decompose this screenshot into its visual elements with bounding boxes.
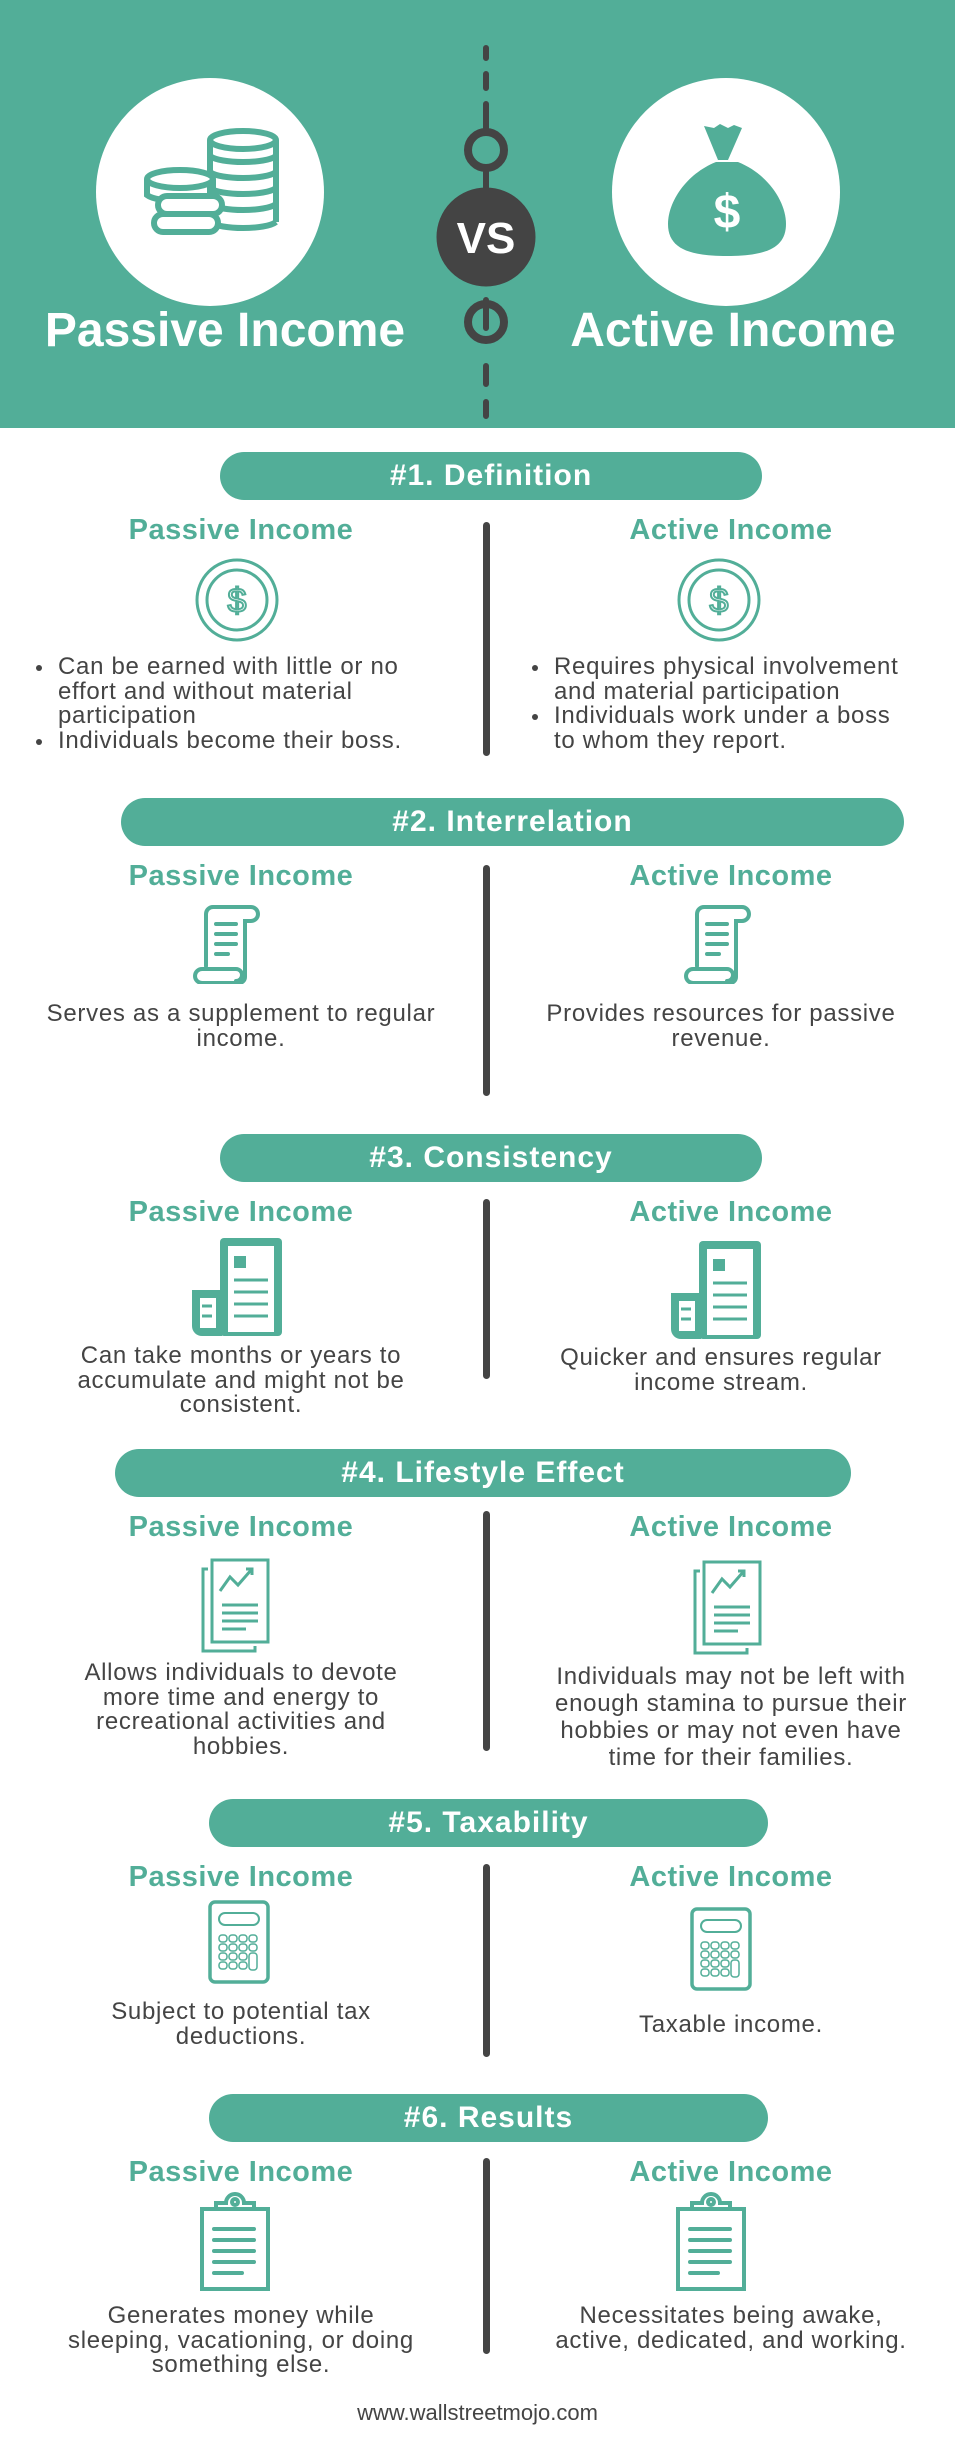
icon: calculator passive <box>208 1900 270 1984</box>
text active: Quicker and ensures regular <box>560 1344 882 1371</box>
pill heading: #1. Definition <box>390 459 592 492</box>
text passive: Subject to potential tax <box>111 1998 371 2025</box>
pill heading: #6. Results <box>404 2101 573 2134</box>
title: Active Income: Active Income <box>570 304 896 357</box>
text active: Necessitates being awake, <box>580 2302 882 2329</box>
subheading active: Active Income <box>629 2156 833 2188</box>
text active: enough stamina to pursue their <box>555 1690 907 1717</box>
subheading passive: Passive Income <box>129 514 353 546</box>
pill heading <box>209 1799 768 1847</box>
vs connector <box>436 45 536 419</box>
bullets passive: participation <box>58 702 197 729</box>
vs connector: VS <box>457 214 515 263</box>
text passive: Allows individuals to devote <box>84 1659 398 1686</box>
subheading passive: Passive Income <box>129 1196 353 1228</box>
icon: chart document passive <box>202 1558 270 1652</box>
text active: active, dedicated, and working. <box>555 2326 907 2354</box>
subheading active: Active Income <box>629 1196 833 1228</box>
divider <box>483 865 490 1096</box>
section 5: Taxability <box>111 1799 833 2057</box>
text passive: sleeping, vacationing, or doing <box>68 2326 414 2354</box>
icon: newspaper passive <box>192 1238 282 1336</box>
text active: Provides resources for passive <box>546 1000 896 1027</box>
text active: hobbies or may not even have <box>560 1717 902 1744</box>
icon: dollar coin active <box>678 558 760 642</box>
pill heading: #3. Consistency <box>369 1141 613 1174</box>
icon: dollar coin passive <box>196 558 278 642</box>
text passive: income. <box>197 1024 285 1052</box>
text active: income stream. <box>634 1368 808 1396</box>
text active: Taxable income. <box>639 2011 823 2038</box>
subheading passive: Passive Income <box>129 1511 353 1543</box>
pill heading <box>220 452 762 500</box>
footer url: www.wallstreetmojo.com <box>357 2400 598 2425</box>
pill heading <box>220 1134 762 1182</box>
text active <box>546 1000 896 1052</box>
bullets passive: Can be earned with little or no <box>58 653 399 680</box>
text passive: Generates money while <box>108 2302 374 2329</box>
pill heading: #5. Taxability <box>388 1806 589 1839</box>
icon: scroll active <box>684 905 751 984</box>
subheading passive: Passive Income <box>129 860 353 892</box>
title: Passive Income: Passive Income <box>45 304 405 357</box>
subheading active: Active Income <box>629 860 833 892</box>
subheading passive: Passive Income <box>129 1861 353 1893</box>
text passive: consistent. <box>180 1391 302 1418</box>
icon: dollar coin passive: $ <box>228 582 247 620</box>
bullets passive: Individuals become their boss. <box>58 726 402 754</box>
subheading active: Active Income <box>629 1511 833 1543</box>
text passive: deductions. <box>176 2022 306 2050</box>
bullets passive: effort and without material <box>58 678 353 704</box>
icon: clipboard passive <box>200 2192 270 2291</box>
divider <box>483 1511 490 1751</box>
text active <box>555 1663 907 1771</box>
section 4: Lifestyle Effect <box>84 1449 907 1771</box>
icon: clipboard active <box>676 2192 746 2291</box>
section 6: Results <box>68 2094 907 2378</box>
text passive: something else. <box>152 2351 330 2378</box>
bullets active: Requires physical involvement <box>554 653 898 680</box>
divider <box>483 2158 490 2354</box>
text passive: hobbies. <box>193 1732 289 1760</box>
icon: dollar coin active: $ <box>710 582 729 620</box>
icon: chart document active <box>694 1560 762 1654</box>
text active <box>555 2302 907 2354</box>
text passive <box>77 1342 405 1418</box>
bullets active: and material participation <box>554 678 840 704</box>
bullets active: to whom they report. <box>554 726 787 754</box>
text passive <box>68 2302 414 2378</box>
icon: scroll passive <box>193 905 260 984</box>
pill heading: #4. Lifestyle Effect <box>341 1456 625 1489</box>
bullets active <box>532 653 898 754</box>
divider <box>483 1864 490 2057</box>
pill heading: #2. Interrelation <box>392 805 633 838</box>
text passive: Serves as a supplement to regular <box>47 1000 435 1027</box>
section 2: Interrelation <box>47 798 904 1096</box>
text passive <box>84 1659 398 1760</box>
bullets passive <box>36 653 402 754</box>
icon: money bag circle <box>612 78 840 306</box>
pill heading <box>115 1449 851 1497</box>
subheading active: Active Income <box>629 1861 833 1893</box>
text active: revenue. <box>672 1024 770 1052</box>
text passive: Can take months or years to <box>81 1342 401 1369</box>
icon: newspaper active <box>671 1241 761 1339</box>
subheading passive: Passive Income <box>129 2156 353 2188</box>
section 1: Definition <box>36 452 898 756</box>
text passive <box>111 1998 371 2050</box>
pill heading <box>121 798 904 846</box>
icon: coin stacks circle <box>96 78 324 306</box>
bullets active: Individuals work under a boss <box>554 702 890 729</box>
text passive <box>47 1000 435 1052</box>
divider <box>483 1199 490 1379</box>
pill heading <box>209 2094 768 2142</box>
text active: time for their families. <box>609 1744 853 1771</box>
icon: money bag circle: $ <box>714 186 741 239</box>
subheading active: Active Income <box>629 514 833 546</box>
text active: Individuals may not be left with <box>556 1663 906 1690</box>
section 3: Consistency <box>77 1134 882 1418</box>
text active <box>560 1344 882 1396</box>
icon: calculator active <box>690 1907 752 1991</box>
text passive: recreational activities and <box>96 1708 386 1735</box>
text passive: accumulate and might not be <box>77 1366 405 1394</box>
text passive: more time and energy to <box>103 1684 379 1710</box>
header band <box>0 0 955 428</box>
divider <box>483 522 490 756</box>
